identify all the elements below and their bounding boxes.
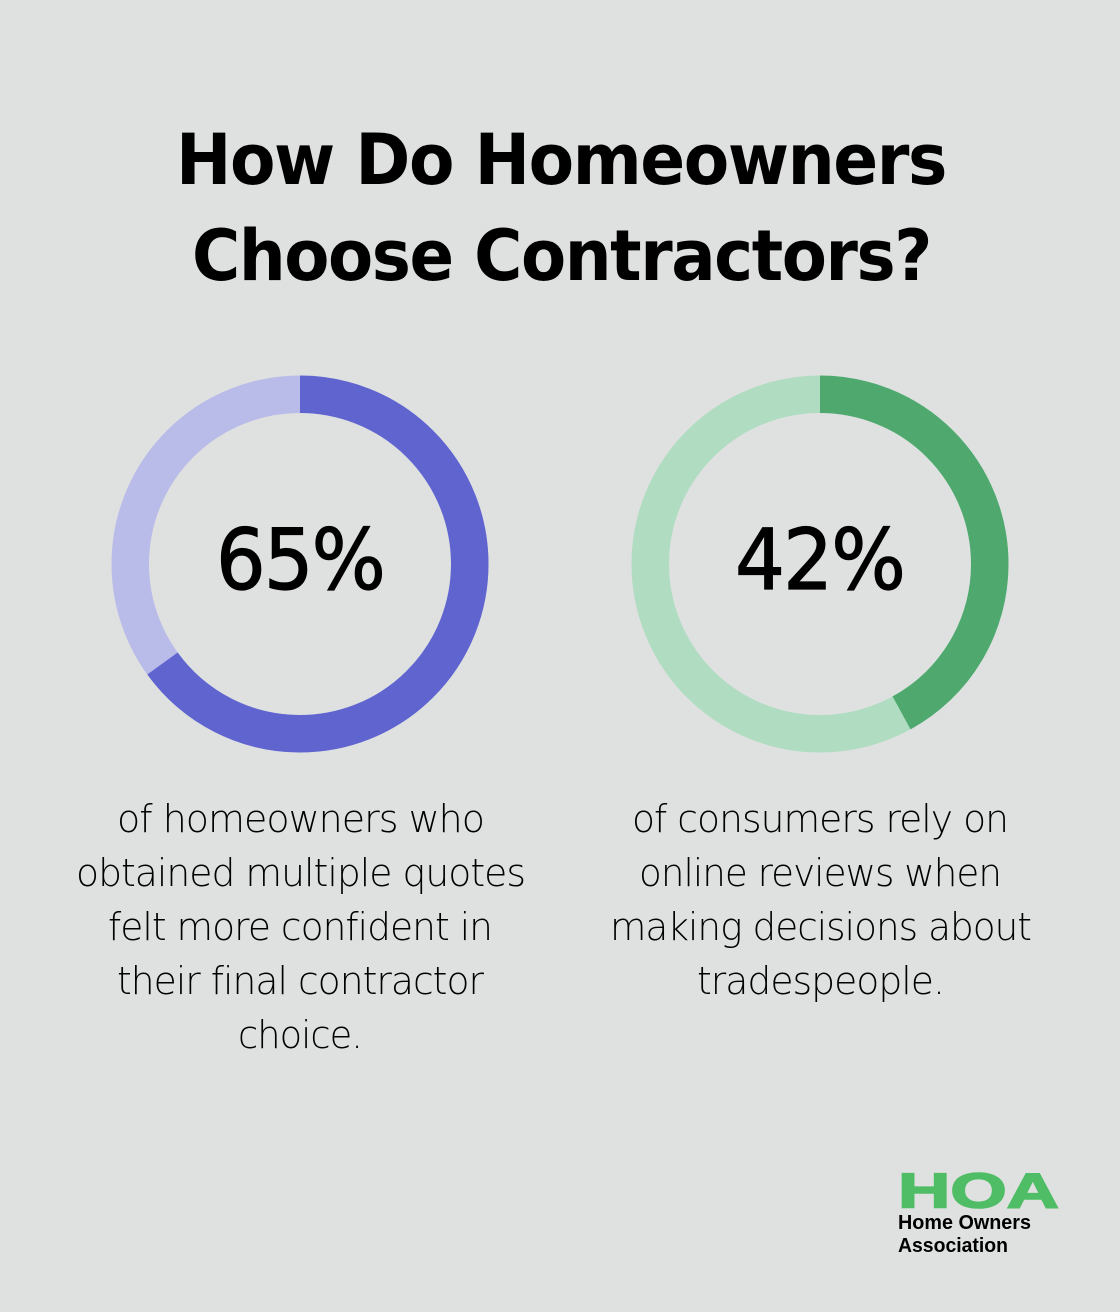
donut chart: 65% [130,394,470,734]
logo: HOA Home Owners Association: Association [898,1235,1008,1257]
donut chart: 42%: 42% [735,511,904,609]
text: consumers description: making decisions about [610,905,1031,950]
donut chart: 42% [650,394,990,734]
text: homeowners description: of homeowners who [117,797,484,842]
title [176,119,946,297]
text: homeowners description: felt more confident in [108,905,492,950]
logo: HOA Home Owners Association: Home Owners [898,1212,1031,1234]
text: consumers description: online reviews when [639,851,1001,896]
text: homeowners description: choice. [238,1013,362,1058]
logo: HOA Home Owners Association [898,1164,1059,1257]
panel: 65% homeowners [76,394,525,1058]
panel: 42% consumers [610,394,1031,1004]
text: consumers description: tradespeople. [697,959,944,1004]
logo: HOA Home Owners Association: HOA [898,1164,1059,1218]
text: consumers description: of consumers rely on [632,797,1008,842]
title: Choose Contractors? [192,215,931,297]
text: homeowners description: obtained multiple quotes [76,851,525,896]
donut chart: 65%: 65% [216,511,384,609]
text: homeowners description: their final contractor [117,959,484,1004]
title: How Do Homeowners [176,119,946,201]
text: homeowners description [76,797,525,1058]
text: consumers description [610,797,1031,1004]
